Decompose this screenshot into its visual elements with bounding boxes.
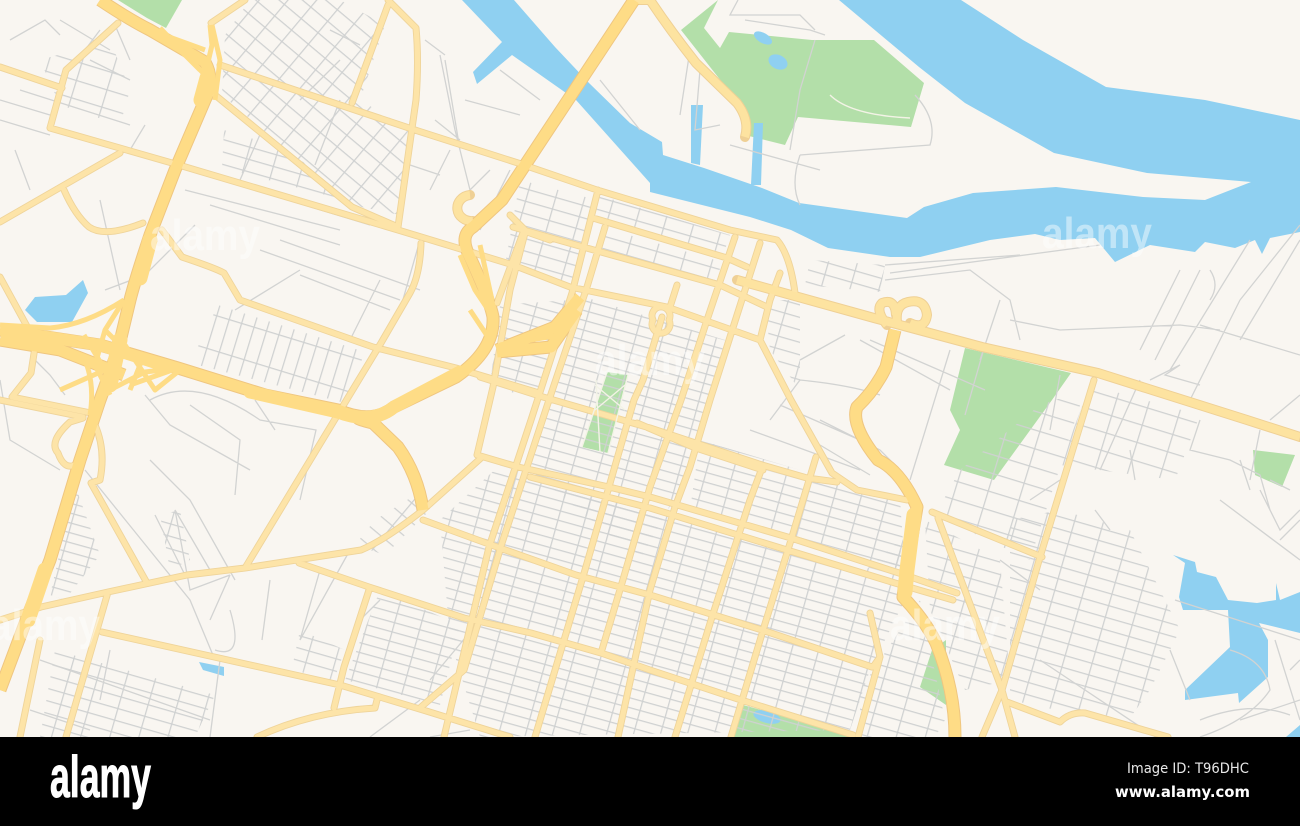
watermark: alamy [150,211,260,260]
highway interchange ramps [0,25,560,415]
watermark [0,209,1152,650]
alamy logo: alamy [50,745,151,810]
watermark: alamy [890,601,1000,650]
park paths [582,95,910,453]
street grids [40,0,1200,737]
black footer band [0,737,1300,826]
website: www.alamy.com [1115,783,1250,801]
wide highway sections [20,78,914,620]
watermark: alamy [1042,209,1152,258]
watermark: alamy [595,336,705,385]
image id: Image ID: T96DHC [1127,761,1249,777]
